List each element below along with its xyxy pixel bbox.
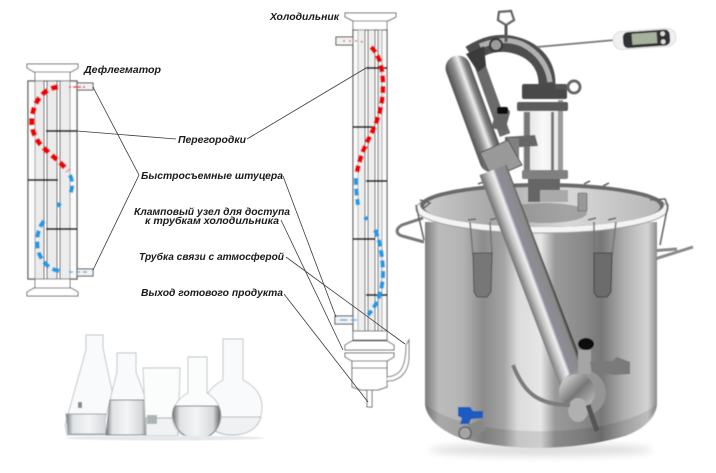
product outlet pipe [588, 405, 597, 431]
condenser top fitting [336, 37, 353, 45]
label: Клампа [134, 206, 290, 227]
condenser top neck [353, 21, 387, 30]
dephlegmator bottom cap [27, 288, 78, 296]
lower fitting assembly [559, 338, 630, 422]
right handle [622, 247, 693, 268]
round flask with water [172, 357, 221, 439]
dephlegmator bottom neck [35, 279, 70, 288]
sight glass section [517, 84, 568, 202]
left handle [397, 218, 424, 242]
dephlegmator top cap [27, 64, 78, 72]
pot shadow [429, 444, 653, 456]
flask table reflection [65, 436, 265, 440]
dephlegmator top fitting [77, 83, 93, 90]
right latch [594, 222, 616, 297]
label: Клампа: к трубкам холодильника [145, 215, 279, 227]
label: Холодильник: Холодильник [269, 11, 340, 23]
drain valve [458, 407, 486, 440]
label: Клампа: Кламповый узел для доступа [134, 206, 290, 218]
label: Перегородки: Перегородки [178, 134, 247, 146]
condenser body with tubes [353, 30, 387, 331]
label: Трубка связи с атмосферой: Трубка связи с атмосферой [139, 251, 285, 263]
photo: laboratory flasks [65, 335, 262, 439]
flask 1 [65, 335, 114, 435]
column clamp ring [480, 140, 522, 178]
upper column pipe [458, 68, 492, 160]
dephlegmator body with tubes [28, 81, 77, 279]
blue condensate path outlet [69, 271, 89, 273]
curved drain tube [513, 365, 570, 405]
clamp unit and product outlet [345, 331, 394, 407]
condenser top cap [345, 13, 396, 21]
middle fittings [491, 107, 538, 160]
pot lower seam shading [426, 405, 656, 448]
thermometer probe [537, 40, 615, 47]
blue condensate path [356, 178, 383, 315]
label: Выход готового продукта: Выход готового продукта [141, 287, 283, 299]
dephlegmator top neck [35, 72, 70, 81]
side ring nut [555, 81, 580, 93]
blue condensate path outlet [340, 319, 357, 321]
lower column pipe [493, 170, 577, 390]
top arch pipe [470, 39, 550, 84]
atmosphere vent tube [387, 340, 409, 381]
top ring nut [498, 11, 514, 42]
pot body [425, 222, 657, 448]
condenser lower fitting [335, 316, 353, 324]
red vapour path inlet [69, 86, 86, 88]
red vapour path inlet [343, 41, 365, 43]
top column clamp [466, 46, 486, 72]
label: Быстросъемные штуцера: Быстросъемные штуцера [141, 170, 283, 182]
round flask with large bulb [203, 339, 262, 435]
dephlegmator bottom fitting [77, 269, 93, 276]
diagram: dephlegmator [27, 64, 93, 296]
label: Дефлегматор: Дефлегматор [83, 64, 162, 76]
blue condensate path [37, 175, 72, 271]
leader lines [77, 68, 405, 402]
red vapour path [357, 47, 383, 172]
beaker [143, 368, 180, 436]
red vapour path [32, 87, 68, 171]
left latch [470, 222, 492, 297]
thermometer [612, 28, 677, 50]
side clamps on rim [416, 205, 668, 245]
rear return pipe [478, 60, 505, 135]
rim clips [420, 181, 668, 220]
flask 2 [105, 353, 148, 435]
lid [416, 183, 668, 233]
diagram: condenser [335, 13, 409, 407]
photo: still [397, 11, 693, 456]
